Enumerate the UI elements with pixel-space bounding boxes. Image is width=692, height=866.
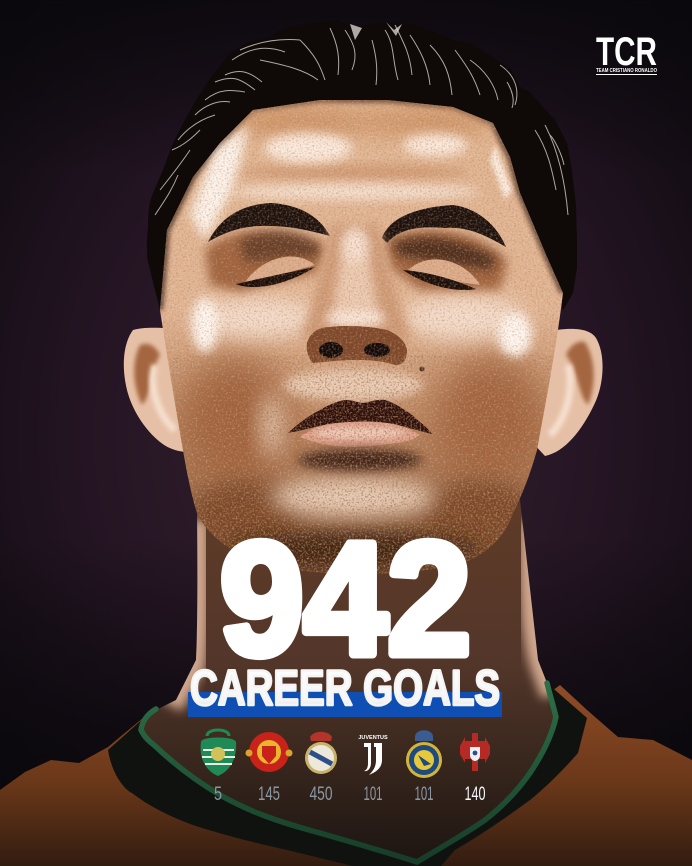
icon: Juventus crest <box>358 735 388 775</box>
headline number: 942 <box>220 509 471 688</box>
eyebrow right <box>382 205 506 247</box>
count: Al Nassr: 101 <box>414 784 434 805</box>
right ear <box>530 329 603 456</box>
hair <box>147 20 577 310</box>
count: Real Madrid: 450 <box>310 784 332 805</box>
count: Sporting: 5 <box>214 784 222 805</box>
collar <box>108 683 587 866</box>
icon: Real Madrid crest <box>305 732 337 774</box>
skin grain <box>160 100 562 574</box>
mouth <box>288 400 432 434</box>
eye sockets <box>205 231 325 292</box>
face <box>160 100 563 574</box>
icon: Juventus crest: JUVENTUS <box>358 735 388 741</box>
count: Portugal: 140 <box>464 784 486 805</box>
logo: TCR: TCR <box>596 30 657 74</box>
icon: Al Nassr crest <box>406 730 442 778</box>
eyelids <box>245 257 315 282</box>
neck <box>141 500 556 862</box>
nose <box>300 225 412 340</box>
shirt <box>0 685 692 866</box>
left ear <box>124 328 190 452</box>
goal counts row <box>214 784 486 805</box>
logo: TCR: TEAM CRISTIANO RONALDO <box>596 68 657 74</box>
count: Juventus: 101 <box>364 784 382 805</box>
icon: Portugal crest <box>460 733 490 771</box>
blue underline bar <box>188 692 502 717</box>
subtitle: CAREER GOALS <box>190 660 500 716</box>
skin highlights <box>264 133 352 163</box>
icon: Manchester United crest <box>246 732 292 772</box>
icon: Sporting crest <box>201 730 236 776</box>
eyebrow left <box>208 203 330 242</box>
forehead tone <box>230 106 370 138</box>
count: Manchester United: 145 <box>258 784 280 805</box>
closed eye lash left <box>236 267 315 287</box>
closed eye lash right <box>403 270 476 290</box>
beard shading <box>180 355 290 485</box>
